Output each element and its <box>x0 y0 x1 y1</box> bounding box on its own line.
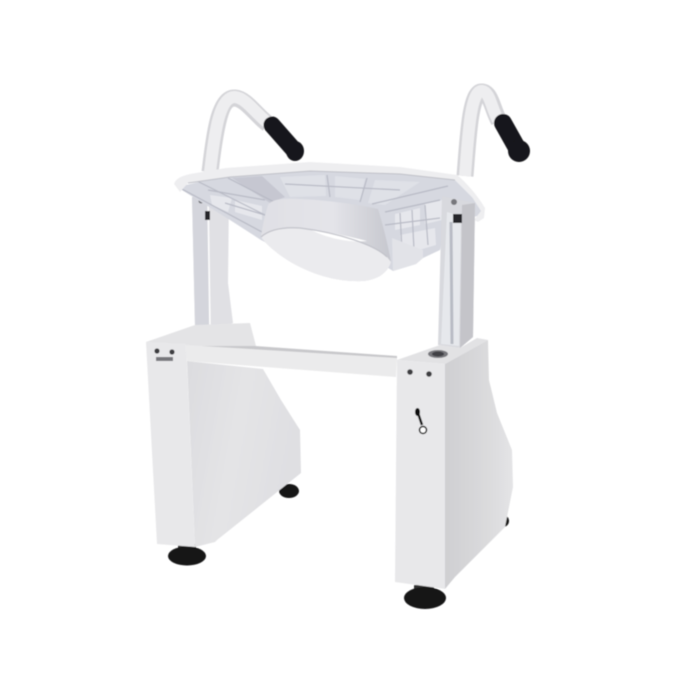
front foot right <box>404 585 446 609</box>
front foot left <box>168 544 206 566</box>
rear foot left <box>279 484 299 498</box>
centre bowl ring <box>261 199 391 281</box>
key and ring <box>415 408 426 434</box>
left base front face <box>146 342 195 547</box>
crossbar <box>185 345 397 377</box>
ring opening <box>309 229 367 241</box>
left base top <box>146 323 256 346</box>
ring inner band <box>261 228 391 281</box>
right grip <box>503 123 530 162</box>
left upright post <box>192 197 233 331</box>
right handrail <box>465 91 530 176</box>
right base top <box>397 338 488 364</box>
left handrail <box>210 97 304 172</box>
rear foot right <box>497 515 509 527</box>
left base side panel <box>187 361 301 547</box>
right base front face <box>395 360 445 589</box>
right base side panel <box>445 340 513 589</box>
seat underside with ribs <box>177 170 483 271</box>
left grip <box>272 125 304 161</box>
right upright post <box>438 196 475 348</box>
seat top rim <box>174 162 485 222</box>
